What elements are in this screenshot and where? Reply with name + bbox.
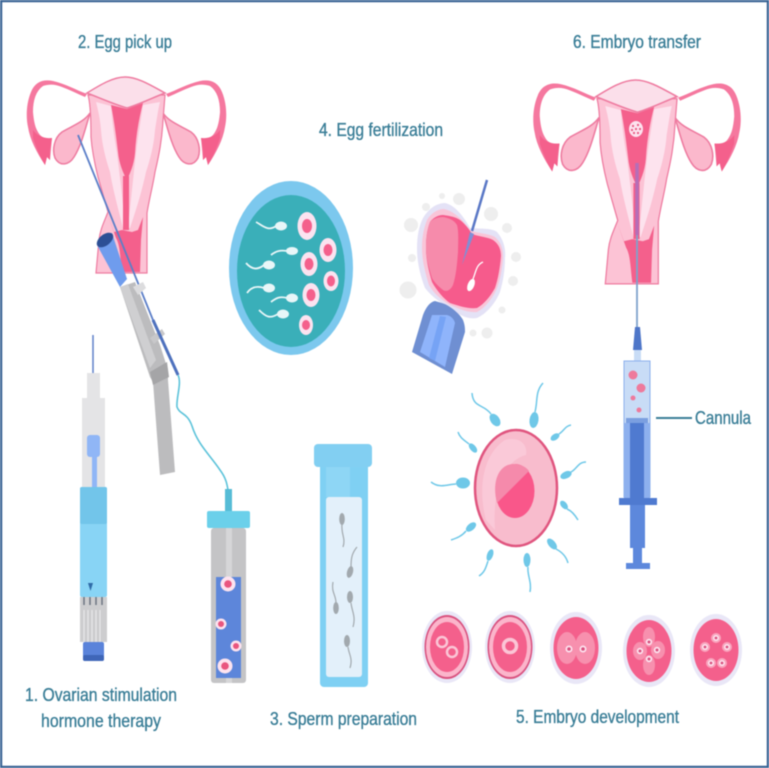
title: 1. Ovarian stimulation hormone therapy: 1. Ovarian stimulation	[25, 685, 177, 705]
title: 5. Embryo development: 5. Embryo development	[516, 707, 679, 727]
collection tube with eggs	[207, 489, 250, 683]
egg retrieval probe	[94, 230, 178, 475]
bubbles	[400, 193, 521, 338]
embryo transfer syringe	[619, 327, 657, 569]
embryo stage 3	[550, 612, 602, 684]
ICSI: egg injection	[400, 180, 521, 374]
hormone injection pen	[80, 335, 107, 661]
title: 6. Embryo transfer: 6. Embryo transfer	[573, 32, 701, 52]
micropipette	[472, 180, 487, 231]
sperm in egg	[466, 278, 476, 292]
label: Cannula	[656, 408, 752, 428]
embryos in syringe	[628, 370, 646, 412]
uterus with embryo and catheter	[533, 80, 741, 328]
label: Cannula: Cannula	[695, 408, 752, 428]
embryo stage 1	[422, 611, 472, 683]
embryo	[629, 121, 643, 137]
uterus with egg retrieval needle	[27, 77, 226, 325]
tubing	[177, 375, 228, 490]
title: 4. Egg fertilization: 4. Egg fertilization	[319, 120, 443, 140]
title: 1. Ovarian stimulation hormone therapy	[25, 685, 177, 731]
sperm	[246, 222, 298, 318]
sperm	[431, 383, 586, 592]
embryo stage 5	[690, 614, 742, 686]
catheter	[635, 163, 639, 235]
title: 2. Egg pick up: 2. Egg pick up	[78, 32, 172, 52]
retrieval needle	[78, 135, 155, 325]
embryo stage 2	[485, 611, 535, 683]
egg surrounded by sperm	[431, 383, 586, 592]
embryo stage 4	[623, 615, 675, 687]
title: 3. Sperm preparation: 3. Sperm preparation	[270, 709, 417, 729]
grey sperm	[333, 513, 357, 668]
sperm preparation tube	[314, 444, 372, 687]
petri dish with eggs and sperm	[229, 181, 353, 355]
eggs	[298, 212, 338, 335]
title: 1. Ovarian stimulation hormone therapy: hormone therapy	[41, 711, 161, 731]
holding pipette	[412, 301, 465, 374]
